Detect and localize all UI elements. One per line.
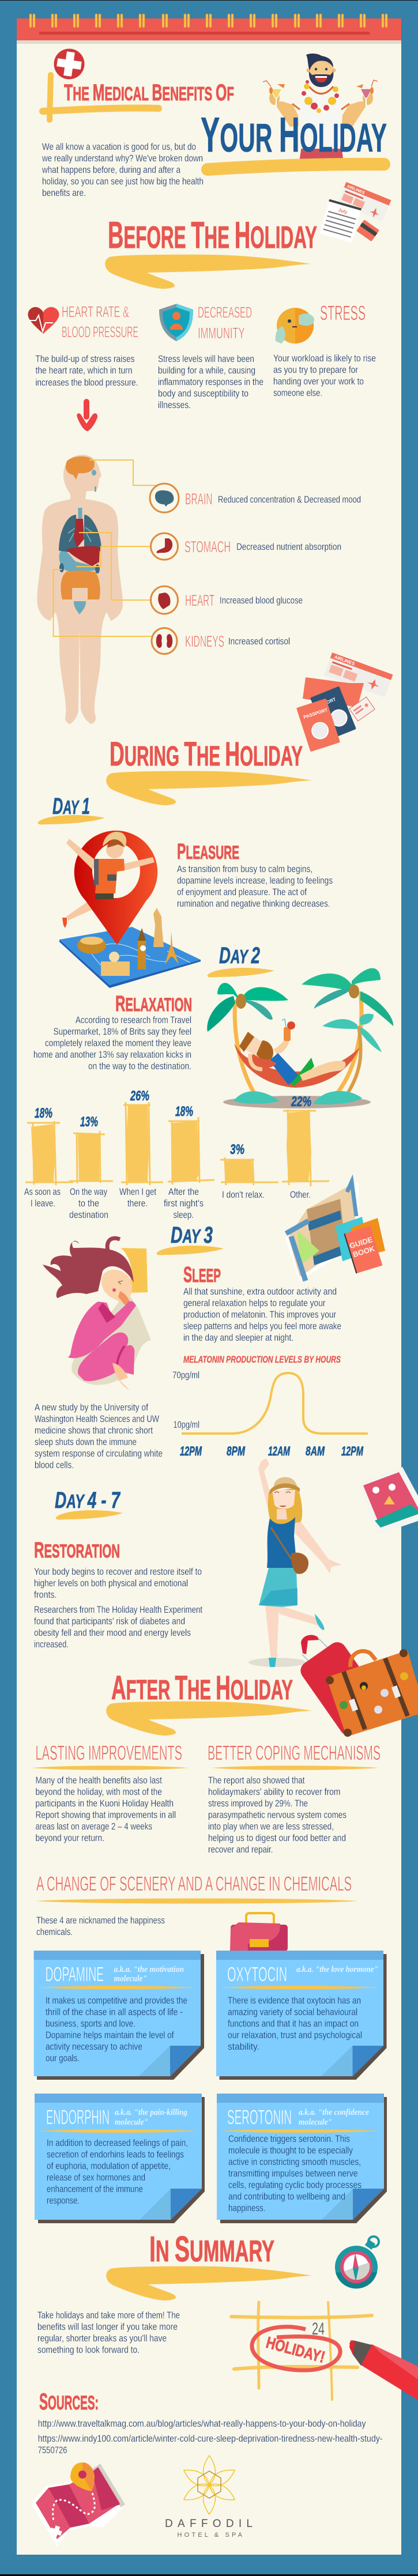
panel: decreased immunity: illnesses. (158, 399, 191, 410)
title underline strokes (43, 75, 159, 120)
panel: lasting improvements: LASTING IMPROVEMENTS (36, 1742, 182, 1764)
organ row: heart: Increased blood glucose (220, 595, 303, 606)
heading: after the holiday: AFTER THE HOLIDAY (111, 1669, 293, 1707)
card: serotonin: SEROTONIN (227, 2106, 292, 2129)
heading: before the holiday: BEFORE THE HOLIDAY (108, 214, 317, 256)
calendar header (17, 14, 401, 44)
logo: daffodil hotel and spa: DAFFODIL (165, 2518, 253, 2530)
intro to chemicals: These 4 are nicknamed the happiness (36, 1915, 165, 1926)
logo: daffodil hotel and spa (165, 2456, 253, 2539)
organ row: heart: HEART (185, 591, 214, 609)
panel: better coping mechanisms: The report also showed that (208, 1775, 305, 1786)
card: serotonin: a.k.a. "the confidence (299, 2108, 369, 2117)
hair (43, 1241, 134, 1298)
heart organ (74, 519, 84, 548)
third palm leaves (322, 1019, 357, 1029)
card: serotonin: active in constricting smooth muscles, (228, 2156, 361, 2167)
right palm leaves (352, 968, 381, 986)
study text: A new study by the University of (35, 1402, 148, 1413)
card: serotonin: molecule is thought to be especially (228, 2145, 353, 2156)
summary text: benefits will last longer if you take more (37, 2321, 178, 2332)
brush swoosh (105, 255, 311, 289)
card: serotonin: Confidence triggers serotonin. This (228, 2133, 350, 2144)
illustration: jumping woman (248, 1458, 342, 1667)
face (101, 1270, 132, 1304)
card: oxytocin: OXYTOCIN (227, 1963, 287, 1986)
relaxation text: completely relaxed the moment they leave (45, 1038, 191, 1048)
panel: better coping mechanisms: stress improved by 29%. The (208, 1798, 308, 1809)
panel: stress: someone else. (273, 387, 322, 398)
arrow down (77, 399, 97, 431)
spiral rings (29, 14, 387, 28)
relaxation text: RELAXATION (115, 992, 192, 1016)
restoration text: fronts. (34, 1589, 57, 1600)
head and beard (239, 1032, 268, 1058)
landmark: eiffel (165, 931, 179, 964)
pin (74, 831, 157, 945)
card: dopamine (34, 1951, 204, 2080)
illustration: pin traveller and map (59, 831, 201, 988)
icon: map and guide book: GUIDE (348, 1235, 374, 1250)
marker (349, 2340, 418, 2404)
card: serotonin: and contributing to wellbeing and (228, 2191, 345, 2202)
intro text: we really understand why? We've broken down (42, 153, 203, 164)
card: oxytocin: stability. (228, 2041, 259, 2052)
restoration text: obesity fell and their mood and energy levels (34, 1627, 191, 1638)
head (272, 1490, 295, 1509)
hammock (234, 1043, 360, 1088)
bar: other 22% (282, 1094, 329, 1200)
study text: sleep shuts down the immune (35, 1436, 137, 1447)
icon: postcard (359, 1467, 418, 1534)
landmark: big ben (138, 941, 146, 970)
illustration: man with cocktails (263, 54, 378, 163)
calendar grid (231, 2302, 372, 2400)
illustration: sleeping woman (43, 1238, 151, 1390)
card: endorphin (35, 2094, 205, 2223)
icon: compass (335, 2236, 379, 2288)
lei of flowers (302, 80, 339, 113)
heading: during the holiday: DURING THE HOLIDAY (110, 736, 303, 773)
card: dopamine: activity necessary to achive (46, 2041, 142, 2052)
panel: stress: handing over your work to (273, 376, 364, 387)
study text (35, 1402, 163, 1470)
heading: a change of scenery (36, 1873, 357, 1903)
bar: when i get there 26% (119, 1088, 163, 1209)
panel: better coping mechanisms: recover and repair. (208, 1844, 273, 1855)
sleep text (183, 1263, 341, 1343)
skirt (259, 1568, 298, 1607)
sources: 7550726 (38, 2445, 67, 2456)
line chart: melatonin production (172, 1354, 368, 1458)
intro text: what happens before, during and after a (42, 164, 180, 175)
line chart: melatonin production: 12PM (180, 1444, 202, 1458)
summary text: something to look forward to. (37, 2344, 140, 2355)
mounds (234, 1091, 280, 1104)
red circle (252, 2327, 340, 2370)
bar: as soon as i leave 18%: I leave. (31, 1198, 55, 1209)
line chart: melatonin production: 10pg/ml (173, 1419, 199, 1430)
sleep text: in the day and sleepier at night. (183, 1332, 293, 1343)
line chart: melatonin production: 8AM (306, 1444, 325, 1458)
bar: on the way 13%: 13% (80, 1114, 98, 1130)
study text: Washington Health Sciences and UW (35, 1413, 159, 1424)
drink arm (274, 1032, 290, 1055)
brain (66, 457, 95, 480)
landmark: liberty (153, 908, 164, 947)
organ row: kidneys: KIDNEYS (185, 632, 224, 650)
icon: map and guide book: BOOK (352, 1244, 376, 1259)
intro to chemicals: chemicals. (36, 1926, 73, 1937)
day 1 label: DAY 1 (52, 794, 90, 819)
intro to chemicals (36, 1915, 165, 1937)
panel: lasting improvements: beyond your return. (36, 1832, 104, 1843)
icon: shield (159, 304, 193, 341)
relaxation text: home and another 13% say relaxation kicks in (33, 1049, 191, 1060)
icon: ticket calendar and cards: July (338, 208, 348, 215)
bar: after first night 18% (164, 1104, 214, 1220)
card: serotonin: molecule" (299, 2118, 332, 2127)
restoration text (34, 1538, 202, 1650)
panel: heart rate: HEART RATE & (62, 303, 129, 320)
panel: better coping mechanisms (208, 1742, 381, 1855)
bar: as soon as i leave 18%: 18% (35, 1106, 52, 1121)
card: endorphin: secretion of endorhins leads to feelings (47, 2149, 184, 2160)
intro text: We all know a vacation is good for us, but do (42, 141, 196, 152)
orange suitcase (326, 1649, 418, 1737)
bar: other 22%: 22% (291, 1094, 311, 1110)
day 4-7 label: DAY 4 - 7 (55, 1488, 120, 1513)
panel: decreased immunity: body and susceptibility to (158, 388, 248, 399)
study text: medicine shows that chronic short (35, 1425, 153, 1436)
intro text (42, 141, 204, 198)
card: serotonin: cells, regulating cyclic body processes (228, 2179, 361, 2190)
relaxation text: According to research from Travel (76, 1014, 191, 1025)
line chart: melatonin production: 12PM (341, 1444, 363, 1458)
card: endorphin: release of sex hormones and (47, 2172, 145, 2183)
illustration: suitcases (297, 1635, 418, 1739)
organ row: heart (151, 586, 303, 614)
landmark: taj mahal (101, 961, 130, 976)
panel: lasting improvements: beyond the holiday, with most of the (36, 1786, 162, 1797)
illustration: holiday calendar with marker (231, 2302, 418, 2404)
restoration text: RESTORATION (34, 1538, 120, 1563)
left palm leaves (217, 983, 239, 1000)
restoration text: Researchers from The Holiday Health Experiment (34, 1604, 202, 1615)
icon: bag (230, 1913, 288, 1951)
panel: stress: STRESS (320, 302, 366, 325)
card: endorphin: a.k.a. "the pain-killing (115, 2108, 187, 2117)
hat (266, 1477, 300, 1493)
stomach (59, 551, 99, 572)
illustration: human body (37, 455, 123, 724)
right arm (294, 1517, 342, 1574)
card: oxytocin: our relaxation, trust and psychological (228, 2030, 362, 2041)
bar chart: when people relax (24, 1088, 329, 1220)
card: endorphin: enhancement of the immune (47, 2183, 143, 2194)
red suitcase (297, 1635, 389, 1739)
panel: lasting improvements: Many of the health benefits also last (36, 1775, 162, 1786)
panel: stress: as you try to prepare for (273, 364, 358, 375)
connector lines (53, 460, 157, 636)
sleep text: production of melatonin. This improves your (183, 1309, 336, 1320)
card: dopamine: DOPAMINE (46, 1963, 104, 1986)
restoration text: higher levels on both physical and emotional (34, 1578, 188, 1589)
bar: after first night 18%: sleep. (173, 1209, 194, 1220)
panel: heart rate (28, 303, 138, 388)
pillow (121, 1248, 148, 1293)
summary text: regular, shorter breaks as you'll have (37, 2333, 167, 2344)
line chart: melatonin production: MELATONIN PRODUCTION LEVELS BY HOURS (183, 1354, 341, 1365)
card: oxytocin: a.k.a. "the love hormone" (296, 1965, 378, 1974)
day 2 label: DAY 2 (219, 943, 260, 968)
shirt (292, 92, 349, 149)
kidneys (59, 563, 64, 572)
card: serotonin (217, 2094, 387, 2223)
landmark: coliseum (77, 937, 106, 954)
card: oxytocin: functions and that it has an impact on (228, 2018, 359, 2029)
pleasure text: rumination and negative thinking decreases. (177, 898, 330, 909)
card: serotonin: happiness. (228, 2202, 265, 2213)
sources: SOURCES: (39, 2389, 99, 2415)
bar: after first night 18%: first night's (164, 1198, 204, 1209)
bar: other 22%: Other. (290, 1189, 311, 1200)
pleasure text (177, 840, 333, 909)
icon: heart (28, 307, 59, 334)
bar: after first night 18%: 18% (175, 1104, 193, 1119)
card: oxytocin (216, 1951, 386, 2080)
pleasure text: PLEASURE (177, 840, 239, 864)
heading: in summary: IN SUMMARY (149, 2230, 274, 2269)
liver (66, 546, 100, 566)
hand (118, 1291, 131, 1311)
bar: i don't relax 3% (220, 1142, 278, 1200)
hair (268, 1487, 302, 1528)
organ row: kidneys (152, 628, 290, 654)
card: serotonin: transmitting impulses between nerve (228, 2168, 357, 2179)
bar: when i get there 26%: 26% (130, 1088, 149, 1104)
panel: decreased immunity: DECREASED (198, 304, 252, 321)
pleasure text: dopamine levels increase, leading to feelings (177, 875, 333, 886)
back leg (66, 900, 92, 921)
silhouette (37, 455, 123, 724)
bar: when i get there 26%: When I get (119, 1186, 156, 1197)
organ row: stomach: STOMACH (184, 538, 231, 556)
standing leg (265, 1605, 279, 1660)
bladder (74, 601, 86, 614)
yellow underline stroke (208, 164, 384, 169)
card: oxytocin: amazing variety of social behavioural (228, 2007, 357, 2017)
icon: ticket calendar and cards: AIRLINES (347, 184, 366, 195)
panel: heart rate: BLOOD PRESSURE (62, 323, 138, 341)
pleasure text: As transition from busy to calm begins, (177, 863, 312, 874)
icon: tickets and passports (296, 653, 393, 752)
icon: map and guide book (285, 1180, 385, 1281)
bar: as soon as i leave 18%: As soon as (24, 1186, 61, 1197)
pajama top (68, 1301, 136, 1358)
day 3 label: DAY 3 (171, 1223, 213, 1248)
intro text: holiday, so you can see just how big the health (42, 176, 204, 187)
card: endorphin: molecule" (115, 2118, 148, 2127)
line chart: melatonin production: 12AM (268, 1444, 290, 1458)
icon: tickets and passports: PASSPORT (303, 707, 328, 720)
study text: system response of circulating white (35, 1448, 163, 1459)
bar: on the way 13%: On the way (70, 1186, 107, 1197)
panel: heart rate: The build-up of stress raises (36, 353, 135, 364)
icon: medical cross (54, 48, 84, 80)
card: dopamine: It makes us competitive and provides the (46, 1995, 187, 2006)
bar: on the way 13%: to the (78, 1198, 99, 1209)
pajama trousers (78, 1333, 134, 1381)
icon: tickets and passports: AIRLINES (333, 654, 356, 666)
flower mark (181, 2456, 238, 2514)
pleasure text: of enjoyment and pleasure. The act of (177, 887, 307, 897)
panel: decreased immunity: inflammatory responses in the (158, 376, 263, 387)
day 2 label (208, 943, 274, 977)
card: endorphin: response. (47, 2195, 80, 2206)
organ row: brain: Reduced concentration & Decreased mood (218, 494, 361, 505)
organ row: stomach: Decreased nutrient absorption (236, 541, 341, 552)
panel: decreased immunity: Stress levels will have been (158, 353, 254, 364)
card: dopamine: molecule" (114, 1974, 147, 1983)
bar: i don't relax 3%: I don't relax. (222, 1189, 265, 1200)
card: dopamine: a.k.a. "the motivation (114, 1965, 184, 1974)
holiday label: HOLIDAY! (264, 2333, 327, 2366)
bar: when i get there 26%: there. (127, 1198, 148, 1209)
back leg (274, 1605, 318, 1625)
bed shadow (71, 1291, 151, 1385)
feet (112, 1363, 130, 1390)
card: endorphin: In addition to decreased feelings of pain, (47, 2137, 188, 2148)
panel: lasting improvements (32, 1742, 189, 1843)
panel: lasting improvements: areas last on average 2 – 4 weeks (36, 1821, 152, 1832)
man body (269, 1053, 300, 1085)
bar: i don't relax 3%: 3% (230, 1142, 244, 1157)
relaxation text: Supermarket, 18% of Brits say they feel (53, 1026, 191, 1037)
day 1 label (38, 794, 105, 824)
sleep text: SLEEP (183, 1263, 221, 1287)
bar: after first night 18%: After the (168, 1186, 199, 1197)
icon: folded map with pin (31, 2462, 125, 2547)
restoration text: found that participants' risk of diabetes and (34, 1616, 185, 1627)
ground (223, 1096, 371, 1108)
bar: as soon as i leave 18% (24, 1106, 73, 1209)
relaxation text (33, 992, 192, 1072)
card: endorphin: ENDORPHIN (46, 2106, 110, 2129)
icon: ticket calendar and cards (319, 182, 391, 243)
lungs (78, 508, 82, 522)
card: endorphin: of euphoria, modulation of appetite, (47, 2160, 171, 2171)
panel: decreased immunity: IMMUNITY (198, 325, 244, 342)
panel: better coping mechanisms: parasympathetic nervous system comes (208, 1809, 347, 1820)
restoration text: Your body begins to recover and restore itself to (34, 1566, 202, 1577)
panel: better coping mechanisms: into play when we are less stressed, (208, 1821, 334, 1832)
line chart: melatonin production: 70pg/ml (172, 1370, 199, 1381)
sleep text: All that sunshine, extra outdoor activity and (183, 1286, 337, 1297)
panel: lasting improvements: participants in the Kuoni Holiday Health (36, 1798, 174, 1809)
organ row: kidneys: Increased cortisol (228, 636, 290, 647)
panel: better coping mechanisms: helping us to digest our food better and (208, 1832, 346, 1843)
panel: stress: Your workload is likely to rise (273, 353, 376, 364)
traveller (66, 839, 98, 869)
head (309, 61, 333, 85)
logo: daffodil hotel and spa: HOTEL & SPA (178, 2532, 243, 2539)
arms (273, 101, 302, 127)
panel: heart rate: the heart rate, which in turn (36, 365, 133, 376)
intro text: benefits are. (42, 187, 86, 198)
panel: stress (273, 302, 376, 398)
card: dopamine: business, sports and love. (46, 2018, 135, 2029)
title: the medical benefits of: THE MEDICAL BENEFITS OF (64, 80, 234, 105)
icon: stressed face (276, 308, 314, 344)
date number: 24 (312, 2319, 325, 2339)
shorts (299, 146, 344, 163)
restoration text: increased. (34, 1639, 69, 1650)
card: oxytocin: There is evidence that oxytocin has an (228, 1995, 361, 2006)
neck and tank top (277, 1509, 287, 1519)
trunks (235, 1000, 254, 1092)
sources (38, 2389, 383, 2456)
summary text: Take holidays and take more of them! The (37, 2310, 180, 2321)
panel: lasting improvements: Report showing that improvements in all (36, 1809, 176, 1820)
eye and mouth (92, 470, 96, 476)
panel: decreased immunity (158, 304, 263, 410)
sleep text: sleep patterns and helps you feel more awake (183, 1321, 341, 1332)
panel: heart rate: increases the blood pressure. (36, 377, 138, 388)
sleep text: general relaxation helps to regulate your (183, 1298, 326, 1308)
bar: on the way 13% (69, 1114, 113, 1220)
study text: blood cells. (35, 1459, 74, 1470)
panel: better coping mechanisms: holidaymakers' ability to recover from (208, 1786, 340, 1797)
cocktails (270, 89, 282, 98)
day 3 label (157, 1223, 224, 1255)
panel: decreased immunity: building for a while, causing (158, 365, 255, 376)
map (59, 927, 201, 985)
brush swoosh (106, 1702, 312, 1736)
illustration: man in hammock (207, 968, 393, 1108)
brush swoosh (106, 2266, 312, 2300)
organ row: brain (150, 484, 361, 512)
brush swoosh (106, 771, 312, 805)
bar: on the way 13%: destination (69, 1209, 108, 1220)
relaxation text: on the way to the destination. (88, 1061, 191, 1072)
icon: tickets and passports: PORT (323, 696, 337, 706)
summary text (37, 2310, 180, 2355)
organ row: brain: BRAIN (185, 490, 212, 508)
card: dopamine: Dopamine helps maintain the level of (46, 2030, 174, 2041)
strap and bag (271, 1528, 295, 1565)
raised arm (258, 1458, 276, 1522)
intestines (61, 571, 100, 599)
card: dopamine: our goals. (46, 2053, 80, 2064)
organ row: stomach (151, 533, 341, 560)
line chart: melatonin production: 8PM (227, 1444, 245, 1458)
card: dopamine: thrill of the chase in all aspects of life - (46, 2007, 183, 2017)
